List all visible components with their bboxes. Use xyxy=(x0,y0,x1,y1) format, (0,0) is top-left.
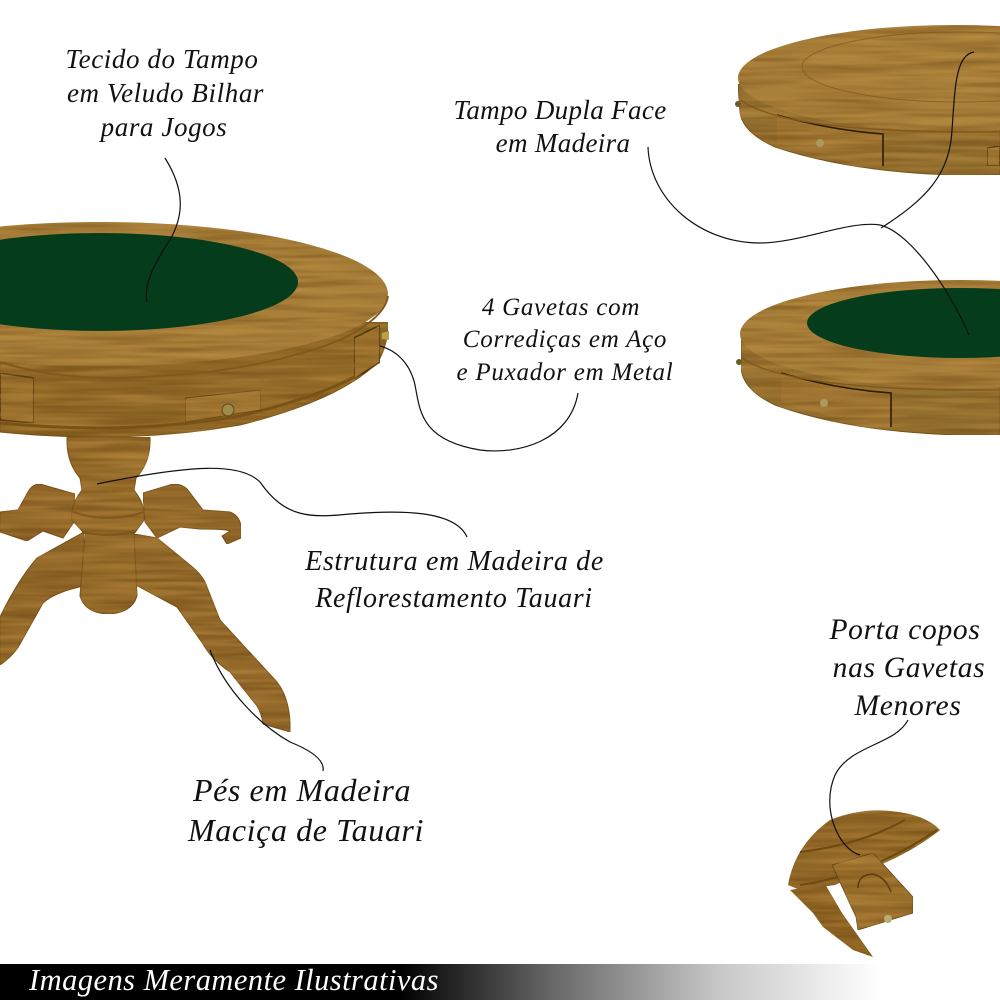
line: drawers xyxy=(380,346,578,451)
text: cup holder: Porta copos xyxy=(828,614,981,646)
drawer xyxy=(832,853,913,930)
line: felt xyxy=(146,158,180,302)
line: structure xyxy=(97,468,467,537)
text: drawers: 4 Gavetas com xyxy=(482,294,640,321)
drawer xyxy=(781,373,891,427)
drawer gap xyxy=(781,373,891,427)
line: double sided branch xyxy=(881,52,974,228)
top xyxy=(740,280,1000,388)
side knob xyxy=(736,359,742,365)
moulding xyxy=(800,820,937,885)
pedestal ring xyxy=(73,512,144,535)
text: feet: Maciça de Tauari xyxy=(187,812,424,848)
table side xyxy=(0,322,388,437)
drawer knob centre xyxy=(222,404,234,416)
moulding xyxy=(741,100,1000,132)
line: cup holder xyxy=(830,720,908,855)
moulding xyxy=(742,358,1000,390)
side xyxy=(738,84,1000,175)
cup holder xyxy=(858,874,891,892)
back right leg xyxy=(143,484,241,544)
text: drawers: e Puxador em Metal xyxy=(457,359,673,386)
text: structure: Estrutura em Madeira de xyxy=(304,546,604,577)
table edge xyxy=(788,810,940,890)
text: felt top: em Veludo Bilhar xyxy=(67,78,264,108)
front left leg xyxy=(0,532,84,665)
upper right table, wood side xyxy=(735,25,1000,175)
drawer left xyxy=(0,373,34,423)
lower right table, green side xyxy=(736,280,1000,435)
green felt xyxy=(807,288,1000,358)
drawer right xyxy=(987,146,1000,166)
drawer right xyxy=(354,325,380,379)
text: cup holder: nas Gavetas xyxy=(833,652,985,684)
drawer xyxy=(777,115,883,166)
text: structure: Reflorestamento Tauari xyxy=(314,583,593,614)
text: double sided top: Tampo Dupla Face xyxy=(453,95,667,125)
footer gradient bar xyxy=(0,963,1000,1000)
knob xyxy=(820,399,828,407)
inset circle xyxy=(802,32,1000,102)
drawer gap xyxy=(777,115,883,166)
side xyxy=(741,340,1000,435)
knob xyxy=(816,139,824,147)
main table xyxy=(0,222,389,732)
knob right xyxy=(382,331,389,340)
back left leg xyxy=(0,484,75,541)
leg xyxy=(790,884,873,957)
footer text: Imagens Meramente Ilustrativas xyxy=(28,963,439,997)
side bottom rim xyxy=(0,362,378,428)
side knob xyxy=(735,101,741,107)
callout lines xyxy=(97,52,974,855)
text: feet: Pés em Madeira xyxy=(192,772,411,808)
front right leg xyxy=(134,534,290,732)
text: felt top: Tecido do Tampo xyxy=(65,44,259,74)
text: double sided top: em Madeira xyxy=(496,128,630,158)
line: double sided top xyxy=(648,147,969,335)
text: felt top: para Jogos xyxy=(99,112,227,142)
green felt xyxy=(0,233,298,331)
text: cup holder: Menores xyxy=(853,690,962,722)
table top xyxy=(0,222,388,366)
top xyxy=(738,25,1000,131)
drawer centre xyxy=(185,390,261,422)
top edge moulding xyxy=(0,296,388,378)
text: drawers: Corrediças em Aço xyxy=(463,326,667,353)
pedestal xyxy=(67,437,150,614)
knob xyxy=(884,915,892,923)
inset: drawer with cup holder xyxy=(788,810,940,957)
line: feet xyxy=(210,650,323,771)
